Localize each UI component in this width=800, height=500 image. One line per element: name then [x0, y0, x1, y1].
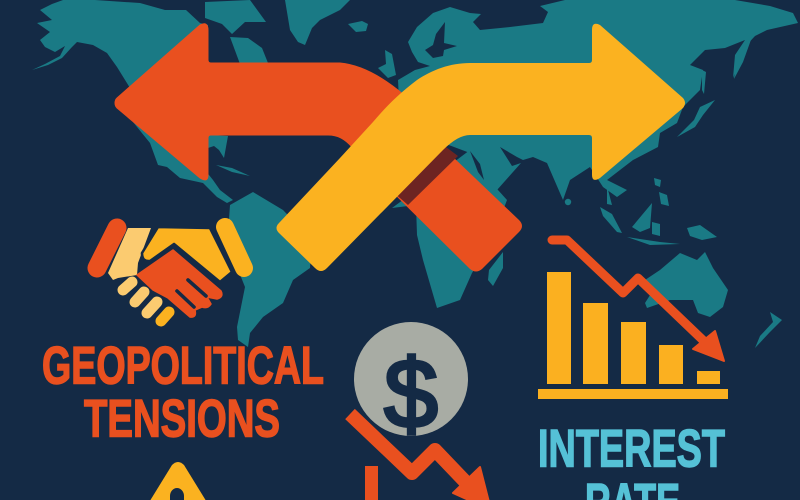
heading line 1: GEOPOLITICAL — [42, 336, 324, 396]
icon: warning triangle — [148, 462, 208, 500]
map: United Kingdom — [378, 50, 396, 78]
keyhole mark — [170, 488, 184, 500]
bar 1 — [547, 272, 571, 384]
map: Florida and Cuba — [208, 135, 250, 176]
map: Japan and Sakhalin — [677, 70, 715, 137]
trend arrow head — [693, 331, 724, 361]
map: Eurasia — [398, 0, 798, 200]
chart baseline — [538, 389, 728, 399]
arrow head — [453, 467, 491, 500]
map: North America — [32, 0, 233, 203]
trend line — [552, 240, 708, 345]
finger gaps — [177, 280, 206, 307]
bar 3 — [621, 322, 646, 384]
map: Sri Lanka — [565, 199, 571, 205]
icon: dollar coin — [354, 322, 468, 448]
map: Baffin and Quebec — [230, 37, 268, 64]
dollar sign: $ — [384, 339, 438, 448]
world map — [32, 0, 798, 348]
map: Iceland — [348, 21, 368, 32]
orange arrow pointing left — [115, 24, 404, 180]
map: Baltic Sea — [425, 22, 457, 58]
left cuff — [97, 228, 117, 268]
icon: handshake — [97, 227, 244, 321]
map: Africa — [392, 150, 507, 308]
map: Southeast Asia islands — [600, 178, 717, 245]
heading line 1: INTEREST — [538, 420, 725, 478]
orange hand — [137, 250, 222, 317]
right cuff — [225, 227, 244, 268]
heading: interest rate — [538, 420, 725, 500]
heading: geopolitical tensions — [42, 336, 324, 448]
yellow knuckle — [161, 312, 169, 321]
bar 2 — [583, 303, 608, 384]
knuckles — [123, 282, 157, 313]
bar 4 — [659, 345, 683, 384]
map: Red Sea — [470, 151, 484, 180]
map: Greenland — [285, 0, 350, 45]
map: New Zealand — [755, 312, 782, 348]
arrow overlap shadow — [385, 135, 458, 205]
triangle body — [148, 462, 208, 500]
yellow hand — [142, 227, 232, 282]
bar 5 — [697, 371, 720, 384]
bar chart: declining rates — [538, 272, 728, 399]
partial bar below coin — [365, 466, 378, 500]
arrow line — [350, 414, 478, 495]
map: South America — [228, 192, 312, 347]
orange arrow tail — [380, 135, 522, 272]
map: Kamchatka detail — [734, 37, 752, 79]
map: Australia — [645, 252, 728, 317]
falling arrow below coin — [350, 414, 491, 500]
coin disc — [354, 322, 468, 436]
map: Arctic islands — [205, 0, 266, 34]
falling trend arrow on chart — [552, 240, 724, 361]
light hand — [108, 228, 151, 280]
heading line 2: TENSIONS — [84, 390, 280, 448]
map: Madagascar — [488, 252, 503, 286]
yellow arrow pointing right — [276, 24, 685, 271]
